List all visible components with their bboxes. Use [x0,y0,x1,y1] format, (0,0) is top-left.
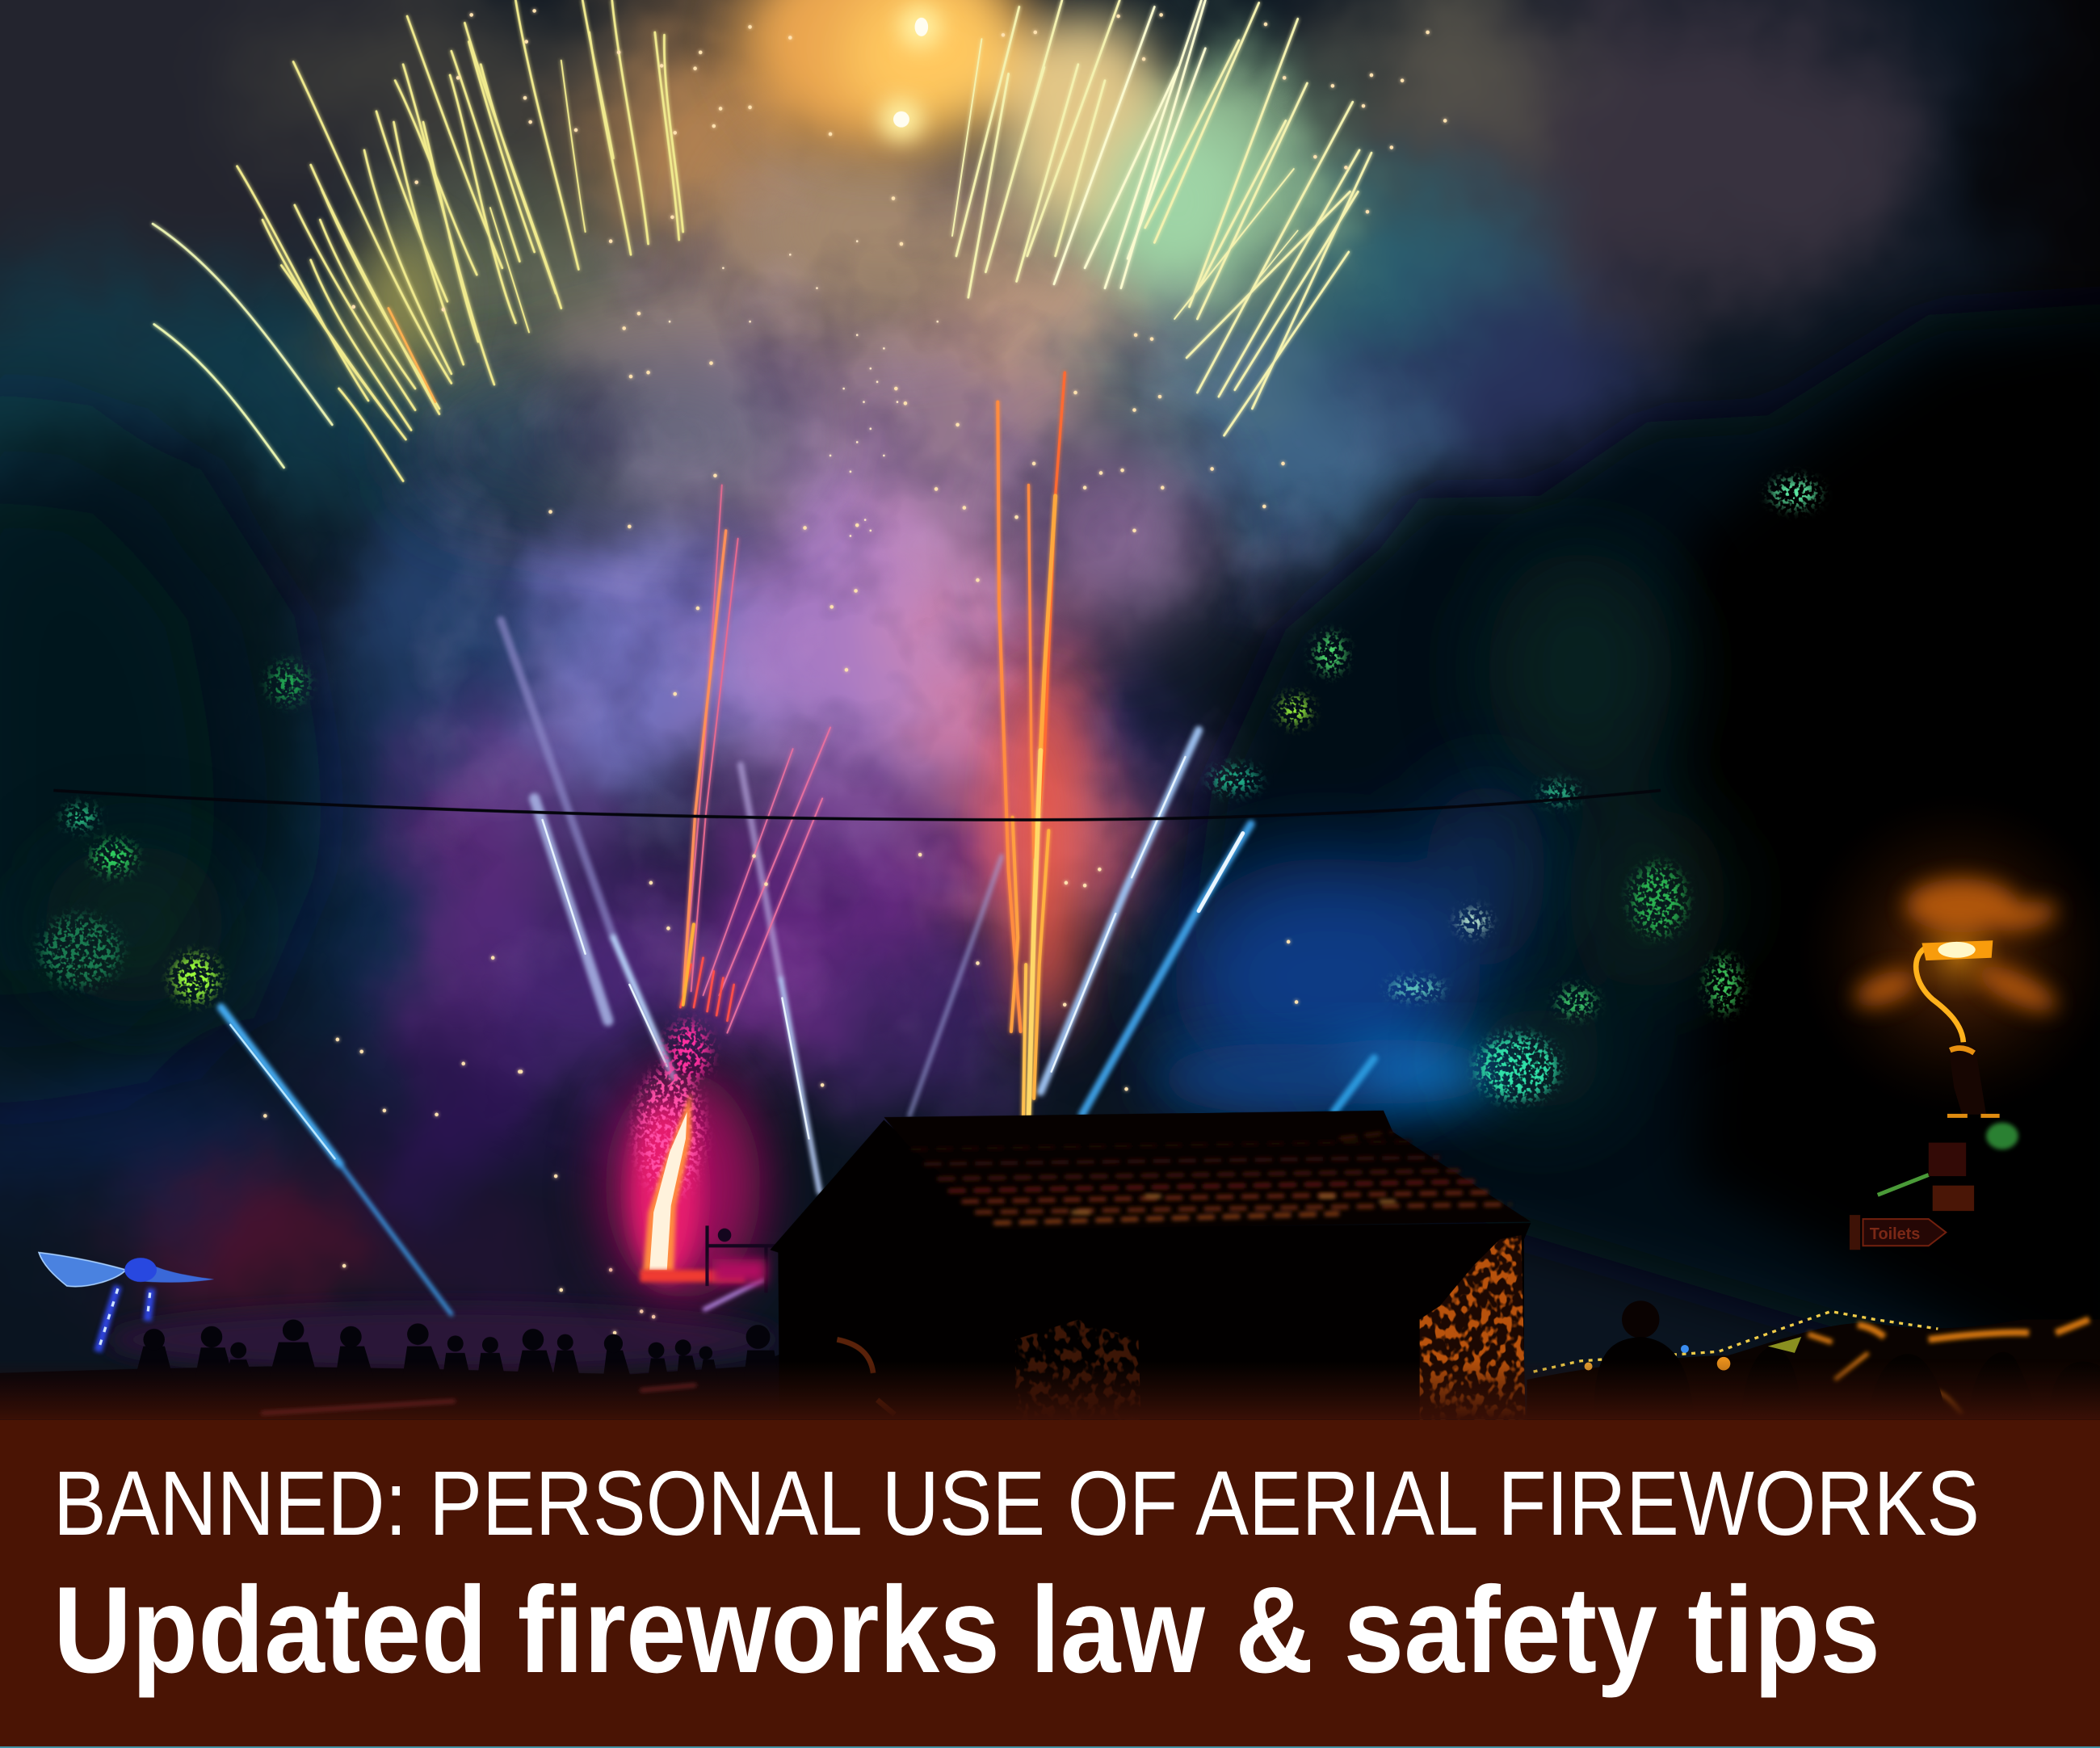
lit ground behind the crowd [107,1308,777,1372]
two bright flares at top [880,6,942,141]
stone hut [770,1111,1531,1420]
lit stone wall corner [1420,1235,1526,1420]
bright blue floor light [1152,1040,1506,1113]
firework streaks: right burst [952,0,1371,435]
bottom edge line [0,1746,2100,1748]
dark tree silhouettes [0,301,2100,1420]
title text [53,1452,1980,1699]
crowd silhouettes right with string lights [1527,1300,2100,1420]
lit roof tiles [911,1132,1510,1223]
bright burst glow at top centre [362,0,1252,1032]
red reflections on the ground [261,1385,696,1414]
faint stone patch at the hut front [1015,1319,1141,1420]
sunlit roof tile accents [1072,1196,1396,1212]
faint tree canopy tint [40,549,1728,1111]
blue lit dragonfly sculpture [39,1253,214,1351]
seated figure highlight [837,1339,895,1414]
street lamp [1797,793,2100,1211]
lit foliage highlights [40,480,1819,1100]
warm fade at the bottom of the photo [0,1359,2100,1420]
toilets direction sign [1850,1215,1946,1250]
overhead wire [53,790,1661,820]
toilets direction sign: Toilets [1870,1225,1920,1243]
smoke cloud texture [417,168,1312,1004]
sparks and star points [265,11,1445,1333]
fill smoke patches under the burst [415,134,1199,630]
firework streaks: left burst [153,0,683,481]
hut roof [884,1111,1531,1229]
blue light behind the trees [1172,777,1547,1099]
firework streaks: central orange column [680,372,1065,1120]
pink flame fountain [605,1022,777,1310]
laser beams [221,620,1374,1314]
headline: updated law and safety tips: Updated fireworks law & safety tips [53,1561,1880,1699]
title band [0,1420,2100,1746]
crowd silhouettes left [0,1319,783,1420]
hut walls [770,1120,1531,1420]
